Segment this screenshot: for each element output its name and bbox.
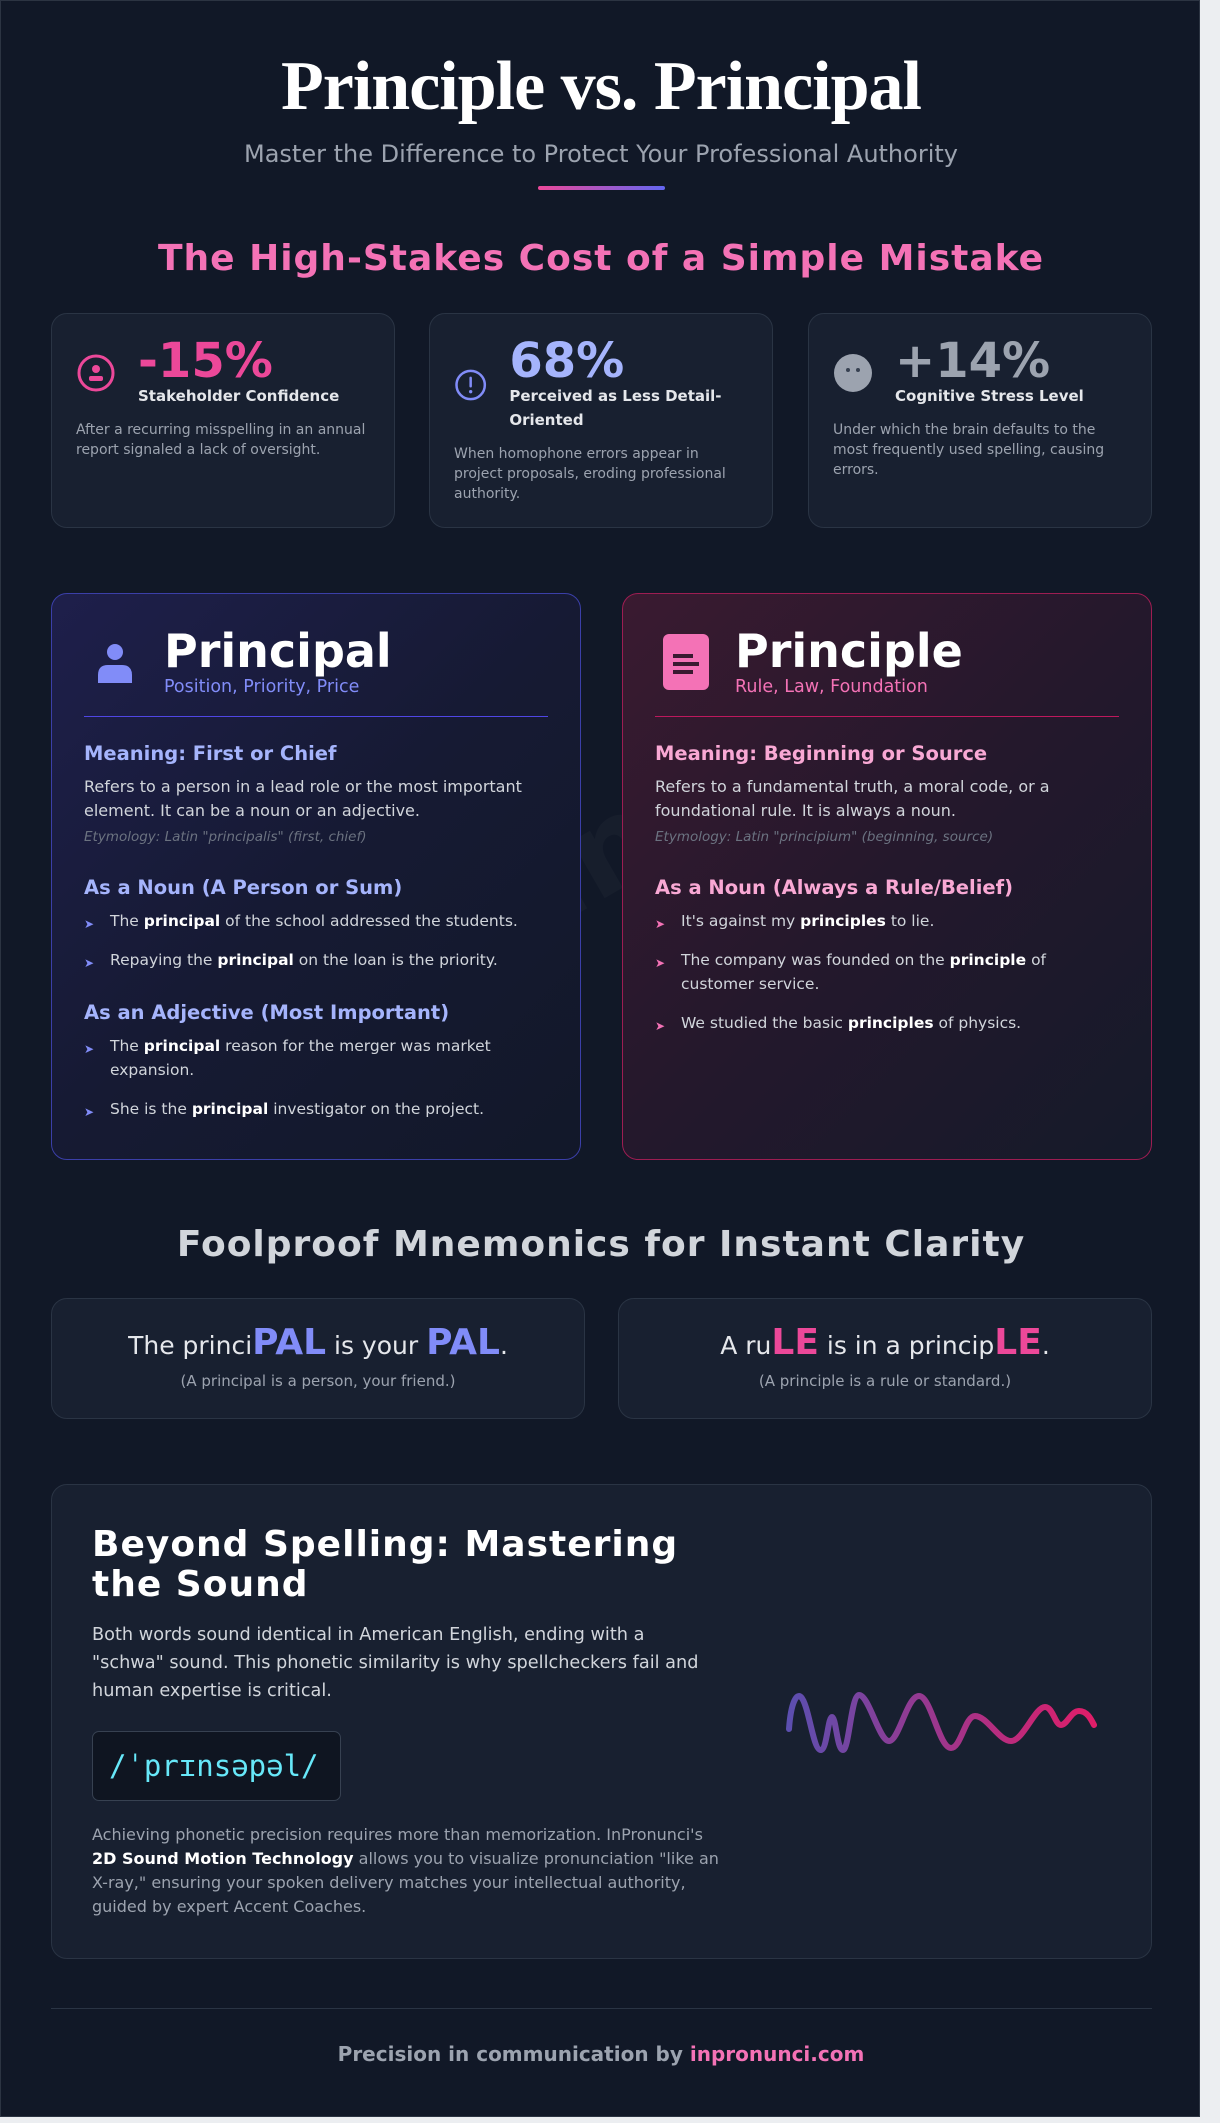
text block: technology: Achieving phonetic precision requires more than memorization. InPronunci's 2D Sound Motion Technology allows you to visualize pronunciation "like an X-ray," ensuring your spoken delivery matches your intellectual authority, guided by expert Accent Coaches. xyxy=(92,1825,719,1916)
icon: user circle xyxy=(78,354,114,392)
accent line xyxy=(538,186,665,190)
panel: principal: Meaning: First or Chief xyxy=(84,742,337,765)
stat card 3: Cognitive Stress Level xyxy=(895,387,1084,405)
panel: principle: We studied the basic principles of physics. xyxy=(681,1014,1021,1032)
panel: principal: Etymology: Latin "principalis" (first, chief) xyxy=(84,829,367,845)
panel header xyxy=(84,626,548,717)
panel: principle xyxy=(622,593,1152,1160)
mnemonic card: PAL: (A principal is a person, your friend.) xyxy=(181,1372,455,1390)
panel: principal: ➤ xyxy=(84,956,94,970)
stat card 3: +14% xyxy=(895,333,1050,389)
stat card 3 xyxy=(808,313,1152,528)
panel: principal: Repaying the principal on the loan is the priority. xyxy=(110,951,498,969)
footer: Precision in communication by inpronunci.com xyxy=(338,2042,864,2066)
mnemonic card: LE xyxy=(618,1298,1152,1419)
panel: principle: As a Noun (Always a Rule/Belief) xyxy=(655,876,1013,899)
heading: high-stakes: The High-Stakes Cost of a Simple Mistake xyxy=(158,238,1044,279)
icon: document xyxy=(663,634,709,690)
panel header: Principal xyxy=(164,624,392,678)
panel: principal: ➤ xyxy=(84,917,94,931)
stat card 2: When homophone errors appear in project proposals, eroding professional authority. xyxy=(454,446,726,502)
mnemonic card: PAL: The princiPAL is your PAL. xyxy=(128,1322,508,1363)
panel: principal: ➤ xyxy=(84,1105,94,1119)
watermark: inpronunci.com xyxy=(86,547,1062,1191)
stat card 3: Under which the brain defaults to the most frequently used spelling, causing errors. xyxy=(833,422,1104,478)
panel: principal xyxy=(51,593,581,1160)
panel: beyond spelling xyxy=(51,1484,1152,1959)
mnemonic card: PAL xyxy=(51,1298,585,1419)
icon: alert xyxy=(455,370,486,400)
panel: principle: ➤ xyxy=(655,956,665,970)
panel header xyxy=(655,626,1119,717)
heading: mnemonics: Foolproof Mnemonics for Instant Clarity xyxy=(177,1224,1025,1265)
stat card 1 xyxy=(51,313,395,528)
panel: principle: ➤ xyxy=(655,917,665,931)
stat card 2 xyxy=(429,313,773,528)
mnemonic card: LE: A ruLE is in a principLE. xyxy=(720,1322,1050,1363)
stat card 2: Perceived as Less Detail-Oriented xyxy=(509,387,722,429)
panel: principal: As an Adjective (Most Important) xyxy=(84,1001,449,1024)
panel: principle: The company was founded on the principle of customer service. xyxy=(681,951,1046,993)
panel: principal: As a Noun (A Person or Sum) xyxy=(84,876,402,899)
IPA box: /ˈprɪnsəpəl/ xyxy=(109,1749,319,1783)
panel header: Rule, Law, Foundation xyxy=(735,677,928,697)
stat card 1: -15% xyxy=(138,333,273,389)
stat card 1: After a recurring misspelling in an annual report signaled a lack of oversight. xyxy=(76,422,365,458)
panel: principal: ➤ xyxy=(84,1042,94,1056)
footer divider xyxy=(51,2008,1152,2009)
IPA box xyxy=(92,1731,341,1801)
panel: principle: It's against my principles to lie. xyxy=(681,912,934,930)
panel: principal: The principal of the school addressed the students. xyxy=(110,912,518,930)
stat card 1: Stakeholder Confidence xyxy=(138,387,339,405)
stat card 2: 68% xyxy=(509,333,624,389)
panel header: Position, Priority, Price xyxy=(164,677,359,697)
panel: principle: ➤ xyxy=(655,1019,665,1033)
panel: principal: The principal reason for the merger was market expansion. xyxy=(110,1037,491,1079)
panel: principle: Refers to a fundamental truth, a moral code, or a foundational rule. It is always a noun. xyxy=(655,777,1050,820)
panel: principal: She is the principal investigator on the project. xyxy=(110,1100,484,1118)
subtitle: Master the Difference to Protect Your Professional Authority xyxy=(244,140,958,168)
title: Principle vs. Principal xyxy=(281,48,921,125)
text block: Both words sound identical in American English, ending with a "schwa" sound. This phonetic similarity is why spellcheckers fail and human expertise is critical. xyxy=(92,1625,698,1701)
panel: principal: Refers to a person in a lead role or the most important element. It can be a noun or an adjective. xyxy=(84,777,522,820)
icon: person xyxy=(98,644,132,683)
panel: principle: Meaning: Beginning or Source xyxy=(655,742,987,765)
heading: Beyond Spelling: Mastering the Sound xyxy=(92,1524,678,1605)
icon: face xyxy=(834,354,872,392)
panel: principle: Etymology: Latin "principium" (beginning, source) xyxy=(655,829,993,845)
mnemonic card: LE: (A principle is a rule or standard.) xyxy=(759,1372,1011,1390)
panel header: Principle xyxy=(735,624,963,678)
